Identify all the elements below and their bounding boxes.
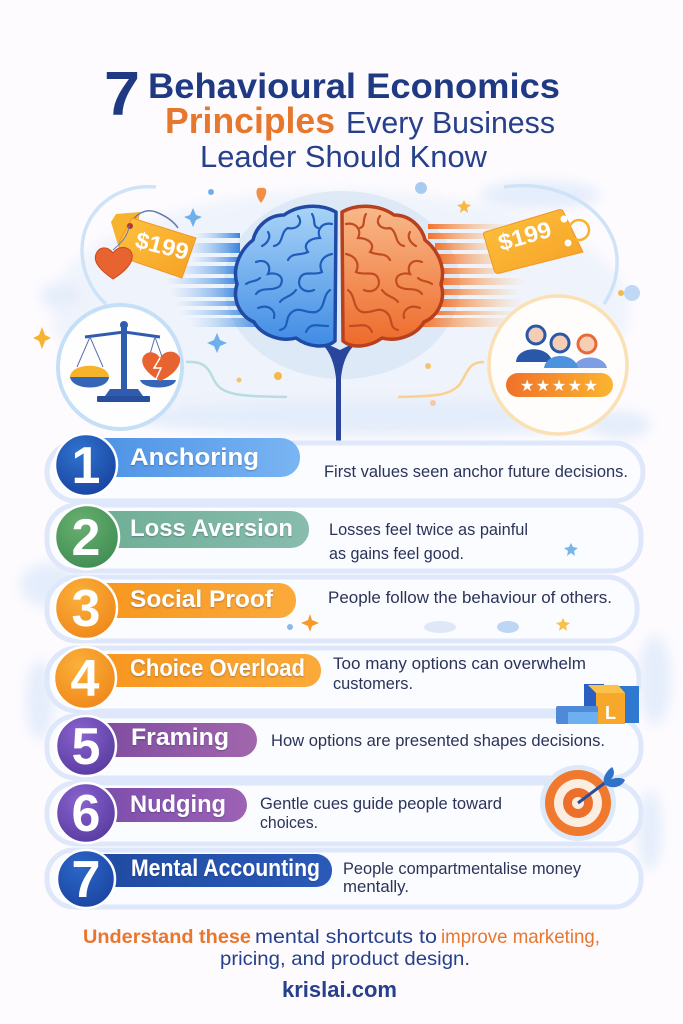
label: Loss Aversion bbox=[130, 515, 293, 542]
number: 7 bbox=[72, 851, 100, 909]
description: choices. bbox=[260, 814, 318, 832]
description: as gains feel good. bbox=[329, 545, 464, 563]
left brain lobe bbox=[235, 206, 336, 346]
title line 2: Principles bbox=[165, 100, 335, 141]
description: Gentle cues guide people toward bbox=[260, 795, 502, 813]
stars and sparkles bbox=[33, 182, 640, 406]
connector right bbox=[398, 362, 484, 397]
number: 2 bbox=[72, 509, 100, 567]
number badge bbox=[57, 850, 115, 908]
label: Framing bbox=[131, 724, 229, 751]
orange speed stripes bbox=[420, 224, 525, 327]
footer line 1: improve marketing, bbox=[441, 926, 600, 948]
social proof circle bbox=[489, 296, 627, 434]
decoration: star bbox=[564, 543, 578, 556]
title line 1: Behavioural Economics bbox=[148, 67, 560, 106]
number badge bbox=[55, 577, 117, 639]
footer line 1: Understand these bbox=[83, 926, 251, 948]
icon: product boxes bbox=[556, 684, 639, 724]
label pill bbox=[85, 583, 296, 618]
label pill bbox=[85, 438, 300, 477]
label: Choice Overload bbox=[130, 655, 305, 682]
label: Anchoring bbox=[130, 444, 259, 471]
number: 1 bbox=[72, 437, 100, 495]
footer line 1: mental shortcuts to bbox=[255, 926, 437, 948]
website: krislai.com bbox=[282, 977, 397, 1002]
number badge bbox=[56, 783, 116, 843]
title bbox=[104, 60, 560, 174]
blue speed stripes bbox=[165, 233, 265, 327]
row 5: Framing bbox=[47, 716, 641, 778]
label pill bbox=[85, 854, 332, 887]
label pill bbox=[85, 511, 309, 548]
background disc bbox=[224, 191, 460, 379]
top right arc bbox=[504, 186, 617, 304]
left price tag with heart bbox=[95, 211, 196, 279]
description: Losses feel twice as painful bbox=[329, 521, 528, 539]
footer line 2: pricing, and product design. bbox=[220, 948, 470, 970]
description: customers. bbox=[333, 675, 413, 693]
numeral 7: 7 bbox=[104, 60, 140, 129]
number: 4 bbox=[71, 650, 100, 708]
description: People follow the behaviour of others. bbox=[328, 589, 612, 607]
label: Social Proof bbox=[130, 586, 274, 613]
label pill bbox=[85, 654, 321, 687]
connector left bbox=[186, 362, 287, 397]
label: Mental Accounting bbox=[131, 855, 320, 882]
title line 3: Leader Should Know bbox=[200, 139, 488, 174]
row 2: Loss Aversion bbox=[47, 505, 641, 571]
right price tag: $199 bbox=[495, 216, 554, 256]
description: mentally. bbox=[343, 878, 409, 896]
description: First values seen anchor future decisions. bbox=[324, 463, 628, 481]
decoration: stars and clouds bbox=[287, 614, 570, 633]
label: Nudging bbox=[130, 791, 226, 818]
icon: target with dart bbox=[540, 765, 625, 841]
description: How options are presented shapes decisions. bbox=[271, 732, 605, 750]
row 1: Anchoring bbox=[47, 434, 643, 501]
footer text bbox=[83, 926, 600, 1002]
hero illustration bbox=[33, 182, 640, 442]
scales circle bbox=[58, 305, 182, 429]
number badge bbox=[54, 647, 116, 709]
social proof circle: ★★★★★ bbox=[520, 378, 598, 395]
number badge bbox=[56, 716, 116, 776]
row 7: Mental Accounting bbox=[47, 850, 641, 909]
number badge bbox=[55, 505, 119, 569]
number: 3 bbox=[72, 580, 100, 638]
number badge bbox=[55, 434, 117, 496]
number: 5 bbox=[72, 718, 100, 776]
row 6: Nudging bbox=[47, 765, 641, 844]
top left arc bbox=[82, 187, 156, 304]
right brain lobe bbox=[342, 206, 443, 346]
icon: product boxes: L bbox=[605, 703, 616, 723]
principles list bbox=[47, 434, 643, 909]
description: People compartmentalise money bbox=[343, 860, 582, 878]
background watercolor wash bbox=[20, 181, 671, 870]
description: Too many options can overwhelm bbox=[333, 655, 586, 673]
row 3: Social Proof bbox=[47, 577, 637, 641]
number: 6 bbox=[72, 785, 100, 843]
title line 2: Every Business bbox=[346, 105, 555, 140]
right price tag bbox=[483, 210, 589, 273]
left price tag with heart: $199 bbox=[133, 227, 191, 265]
label pill bbox=[85, 723, 257, 757]
row 4: Choice Overload bbox=[47, 647, 639, 711]
brain stem bbox=[314, 338, 364, 442]
label pill bbox=[85, 788, 247, 822]
